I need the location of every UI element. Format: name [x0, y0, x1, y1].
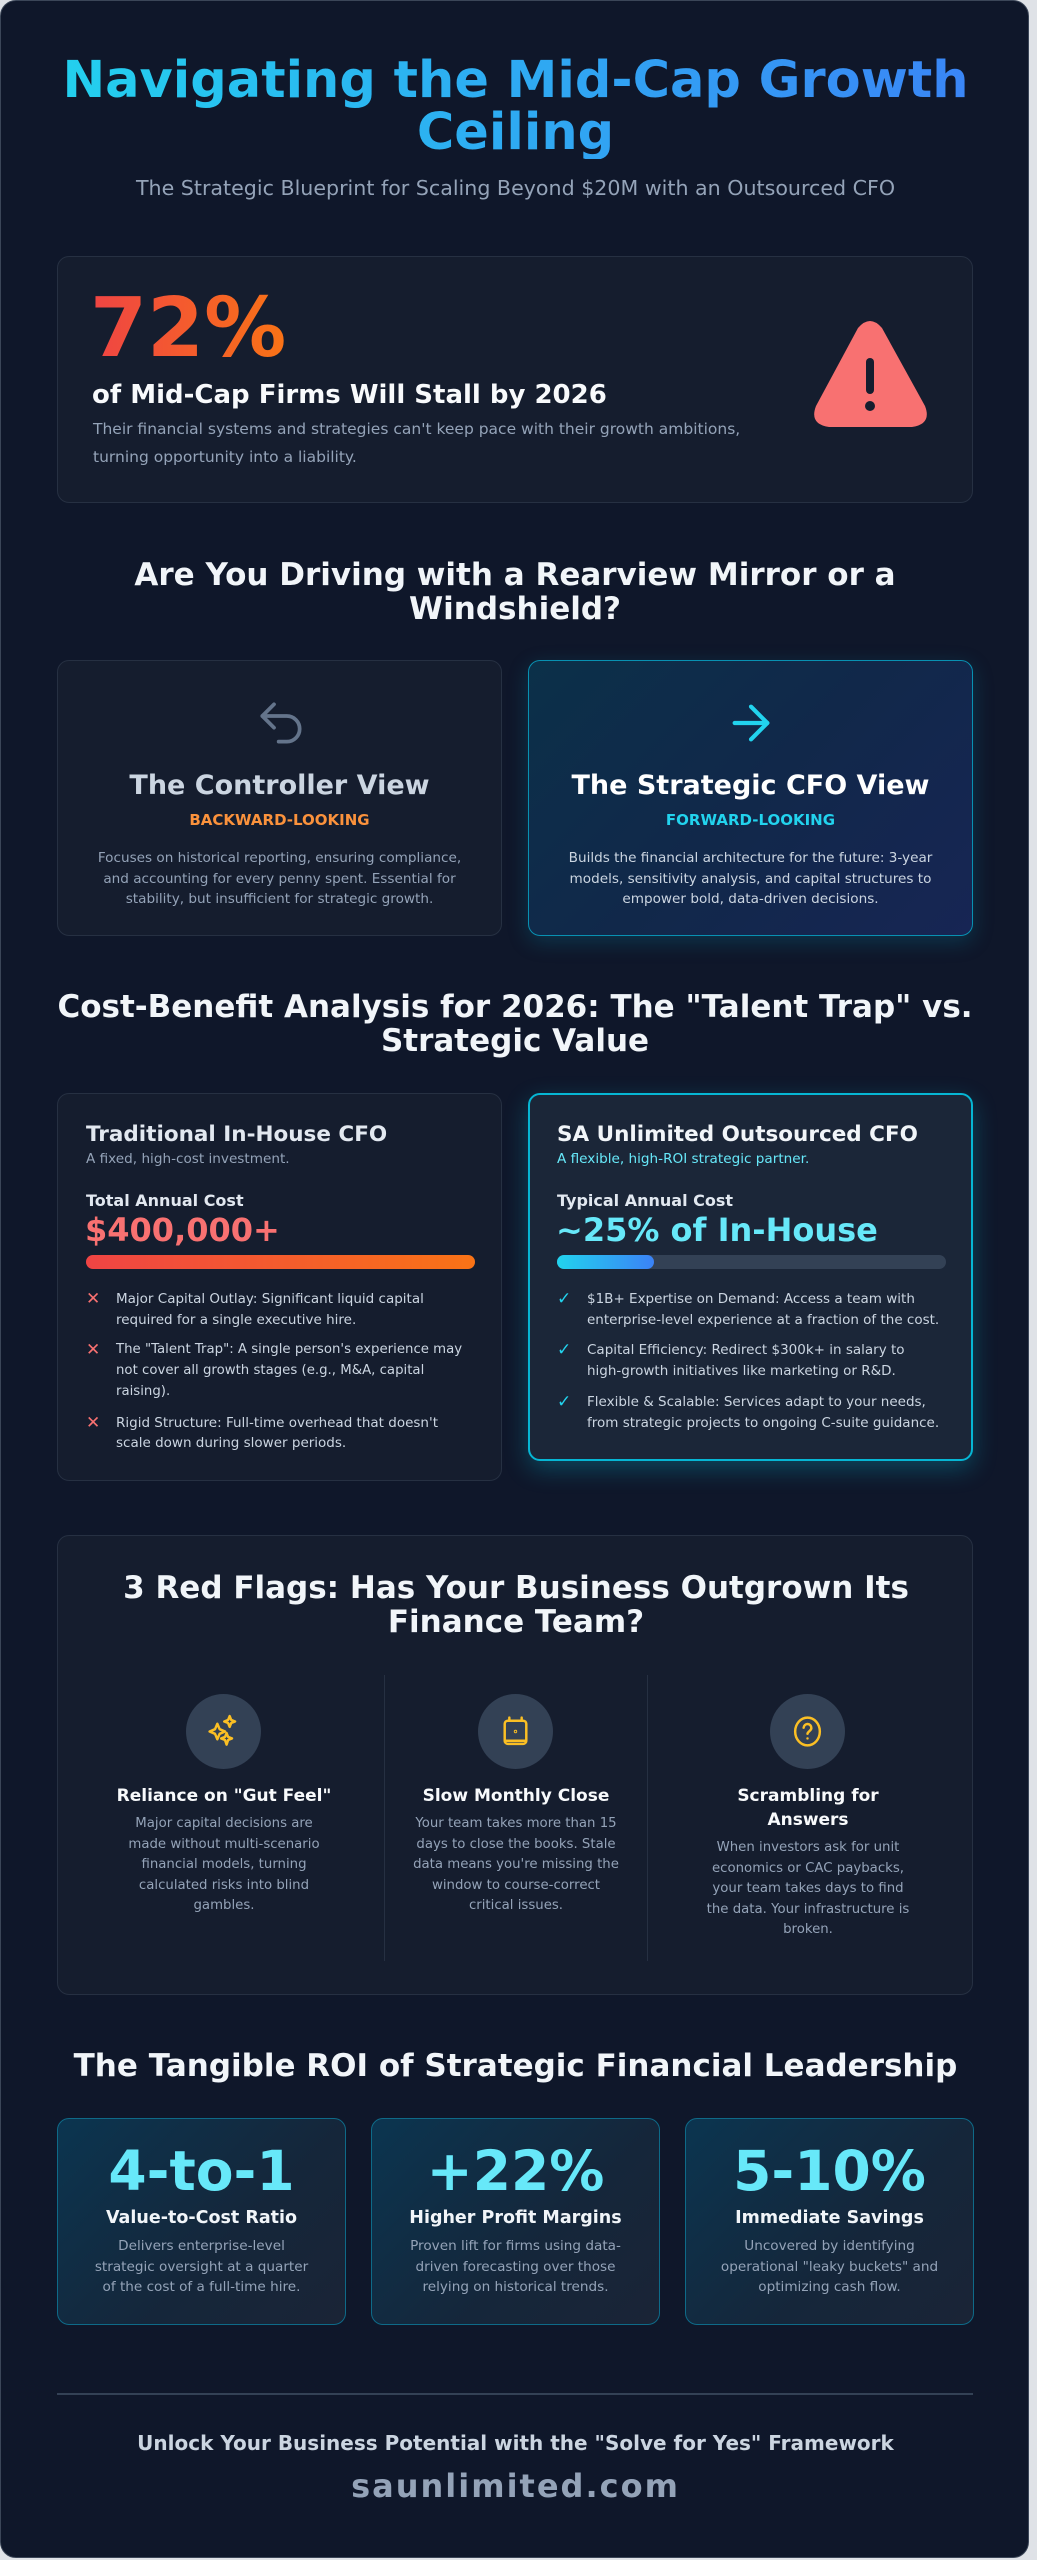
list: benefits: high-growth initiatives like marketing or R&D.	[587, 1363, 896, 1379]
title: Ceiling	[417, 103, 614, 162]
icon: forward arrow	[732, 704, 770, 742]
list: drawbacks: not cover all growth stages (e.g., M&A, capital	[116, 1363, 424, 1378]
icon: calendar	[478, 1694, 553, 1769]
flag: slow close: critical issues.	[469, 1898, 563, 1913]
cost value: $400,000+	[85, 1211, 280, 1249]
flag: scrambling: When investors ask for unit	[717, 1840, 899, 1855]
flag: scrambling: economics or CAC paybacks,	[712, 1860, 904, 1876]
list: benefits	[557, 1289, 939, 1431]
heading: 3 Red Flags: Has Your Business Outgrown Its Finance Team?	[123, 1570, 909, 1640]
list: benefits: ✓	[557, 1392, 571, 1412]
panel: stat card	[57, 256, 973, 503]
flag: scrambling: Scrambling for	[737, 1786, 879, 1806]
card: value-to-cost: Delivers enterprise-level strategic oversight at a quarter of the cost of a full-time hire.	[95, 2238, 308, 2295]
list: benefits: ✓	[557, 1340, 571, 1360]
stat number: 72%	[90, 281, 286, 376]
list: drawbacks	[86, 1289, 462, 1451]
flag: scrambling: the data. Your infrastructure is	[707, 1902, 909, 1916]
card: value-to-cost	[57, 2118, 346, 2325]
card: value-to-cost: 4-to-1	[108, 2139, 295, 2203]
flag: scrambling: broken.	[783, 1922, 833, 1937]
card: profit margins	[371, 2118, 660, 2325]
description: Builds the financial architecture for the future: 3-year models, sensitivity analysis, and capital structures to empower bold, data-driven decisions.	[569, 850, 932, 907]
flag: scrambling: your team takes days to find	[712, 1881, 904, 1896]
card: savings: Immediate Savings	[735, 2208, 924, 2228]
flag: gut feel: Reliance on "Gut Feel"	[117, 1786, 331, 1806]
card: profit margins: +22%	[427, 2139, 604, 2203]
list: drawbacks: The "Talent Trap": A single person's experience may	[116, 1342, 462, 1357]
flag: slow close: Your team takes more than 15 days to close the books. Stale data means you're missing the window to course-correct	[413, 1816, 619, 1892]
list: drawbacks: Rigid Structure: Full-time overhead that doesn't	[116, 1415, 438, 1431]
list: benefits: Capital Efficiency: Redirect $300k+ in salary to	[587, 1342, 905, 1358]
description: Focuses on historical reporting, ensuring compliance, and accounting for every penny spent. Essential for stability, but insufficient for strategic growth.	[98, 850, 461, 907]
card: savings: Uncovered by identifying operational "leaky buckets" and optimizing cash flow.	[721, 2238, 938, 2295]
flag: scrambling	[707, 1694, 909, 1937]
cost bar	[557, 1255, 946, 1269]
cost label: Typical Annual Cost	[557, 1191, 733, 1210]
footer tagline: Unlock Your Business Potential with the "Solve for Yes" Framework	[137, 2431, 894, 2455]
icon: warning	[814, 321, 927, 427]
panel: strategic CFO view	[528, 660, 973, 936]
card: savings: 5-10%	[733, 2139, 926, 2203]
list: drawbacks: Major Capital Outlay: Significant liquid capital	[116, 1291, 424, 1307]
subheading: A fixed, high-cost investment.	[86, 1151, 290, 1167]
cost value: ~25% of In-House	[556, 1211, 878, 1249]
tag: BACKWARD-LOOKING	[189, 811, 370, 829]
icon: question	[770, 1694, 845, 1769]
heading: cost-benefit: Cost-Benefit Analysis for 2026: The "Talent Trap" vs. Strategic Value	[57, 989, 973, 1059]
flag: gut feel: Major capital decisions are made without multi-scenario financial models, turning calculated risks into blind gambles.	[128, 1816, 320, 1913]
flag: scrambling: Answers	[767, 1810, 849, 1830]
panel: red flags	[57, 1535, 973, 1995]
flag: gut feel	[117, 1694, 331, 1913]
icon: back arrow	[260, 702, 302, 744]
heading: rearview vs windshield: Are You Driving with a Rearview Mirror or a Windshield?	[134, 557, 896, 627]
title	[21, 55, 1010, 159]
heading: ROI: The Tangible ROI of Strategic Financial Leadership	[74, 2048, 957, 2084]
panel: in-house CFO	[57, 1093, 502, 1481]
list: benefits: Flexible & Scalable: Services adapt to your needs, from strategic projects to ongoing C-suite guidance.	[587, 1394, 939, 1431]
list: drawbacks: ✕	[86, 1413, 100, 1433]
stat description: Their financial systems and strategies can't keep pace with their growth ambitions, turning opportunity into a liability.	[93, 420, 740, 466]
heading: SA Unlimited Outsourced CFO	[557, 1122, 918, 1147]
cost bar	[86, 1255, 475, 1269]
card: value-to-cost: Value-to-Cost Ratio	[106, 2208, 297, 2228]
heading: Traditional In-House CFO	[86, 1122, 387, 1147]
list: drawbacks: ✕	[86, 1289, 100, 1309]
heading: The Strategic CFO View	[572, 770, 930, 801]
flag: slow close: Slow Monthly Close	[423, 1786, 609, 1806]
list: drawbacks: ✕	[86, 1340, 100, 1360]
tag: FORWARD-LOOKING	[666, 811, 835, 829]
footer website: saunlimited.com	[351, 2467, 680, 2505]
list: drawbacks: required for a single executive hire.	[116, 1312, 356, 1328]
stat heading: of Mid-Cap Firms Will Stall by 2026	[92, 380, 607, 410]
panel: controller view	[57, 660, 502, 936]
heading: The Controller View	[129, 770, 430, 801]
flag: slow close	[413, 1694, 619, 1913]
list: benefits: $1B+ Expertise on Demand: Access a team with enterprise-level experience at a fraction of the cost.	[587, 1291, 939, 1328]
icon: sparkles	[186, 1694, 261, 1769]
list: drawbacks: raising).	[116, 1384, 170, 1399]
cost label: Total Annual Cost	[86, 1191, 244, 1210]
list: drawbacks: scale down during slower periods.	[116, 1435, 346, 1451]
card: savings	[685, 2118, 974, 2325]
card: profit margins: Higher Profit Margins	[409, 2208, 622, 2228]
title: Navigating the Mid-Cap Growth	[62, 51, 969, 110]
subtitle: The Strategic Blueprint for Scaling Beyond $20M with an Outsourced CFO	[136, 176, 895, 200]
panel: outsourced CFO	[528, 1093, 973, 1461]
subheading: A flexible, high-ROI strategic partner.	[557, 1151, 809, 1167]
card: profit margins: Proven lift for firms using data-driven forecasting over those relying on historical trends.	[410, 2238, 621, 2295]
list: benefits: ✓	[557, 1289, 571, 1309]
